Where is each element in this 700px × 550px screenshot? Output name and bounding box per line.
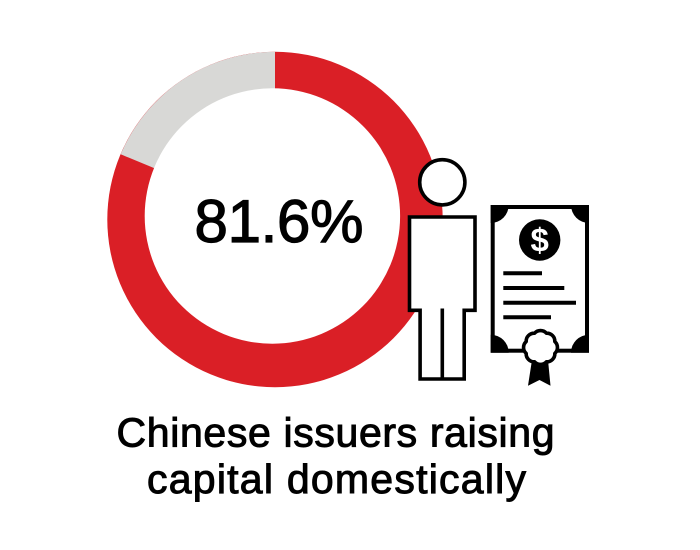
seal: [524, 331, 557, 364]
caption: capital domestically: [147, 456, 526, 502]
certificate text lines: [503, 273, 576, 317]
percentage value: 81.6%: [194, 188, 364, 255]
dollar badge: [519, 219, 560, 261]
caption: Chinese issuers raising: [116, 410, 554, 456]
ribbon: [528, 360, 550, 386]
icon: person: [410, 160, 475, 379]
dollar badge: $: [531, 222, 549, 258]
donut chart: [107, 52, 443, 387]
caption: [116, 410, 554, 502]
infographic: [107, 52, 589, 502]
icon: certificate: [490, 205, 589, 386]
